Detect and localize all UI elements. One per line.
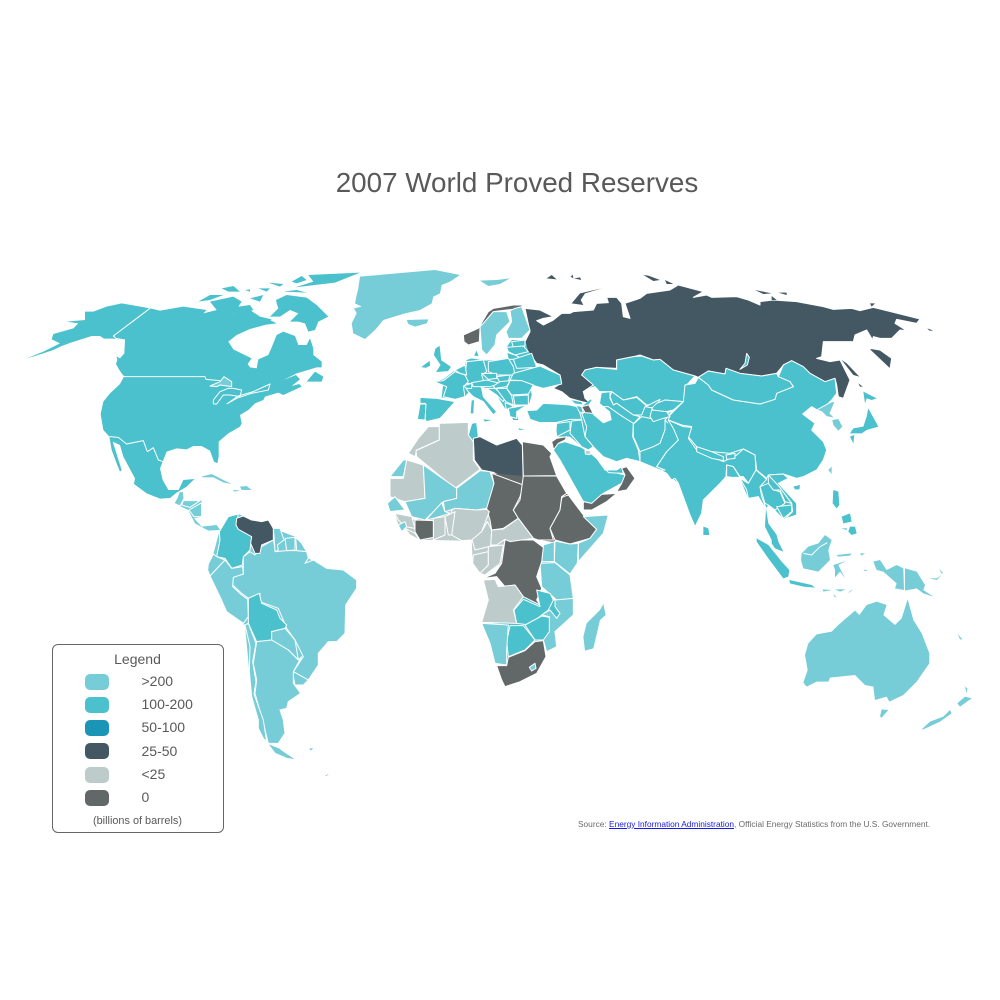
Somalia [578,515,608,562]
base land: southwest and central Asia [557,392,687,470]
Brazil [233,540,357,680]
Czech Republic [482,373,497,379]
Sumatra [757,538,789,578]
Sri Lanka [703,527,709,535]
Syria [556,422,570,437]
Suriname [285,537,295,551]
Guinea [395,513,415,528]
border: Canada and United States [119,373,220,381]
border: Alaska and Canada [113,308,150,340]
Crete [518,428,525,430]
Liberia [405,528,419,540]
Indonesian and Pacific islands [823,553,962,639]
Venezuela [236,516,273,553]
region: Europe [417,305,562,430]
base land: Southern Africa [482,597,573,665]
Western New Guinea [873,560,904,590]
Gabon [473,552,488,573]
Mozambique [542,598,573,652]
Kenya [554,541,578,574]
region: Greenland and North Atlantic [352,270,510,339]
Turkmenistan [597,392,640,424]
swatch: 0 [85,790,109,806]
Romania [507,381,533,395]
Namibia [482,623,508,665]
Madagascar [583,604,606,651]
Zimbabwe [525,616,549,640]
Thailand [760,483,785,510]
Democratic Republic of the Congo [483,540,543,605]
Jordan and Israel [552,437,567,450]
label: 25-50: 25-50 [142,742,177,758]
Mongolia [698,368,793,404]
Guatemala [174,492,184,506]
swatch: 100-200 [85,696,109,712]
Australia [803,599,929,702]
Iraq [570,420,593,450]
Jamaica [233,490,241,492]
base land: Indochina [740,470,797,518]
Central African Republic [491,518,533,545]
label: 50-100: 50-100 [142,718,185,734]
Afghanistan [633,410,673,452]
legend unit note: (billions of barrels) [93,814,182,826]
base land: Sahel and Horn [487,473,597,544]
United Arab Emirates [607,467,623,473]
Sarawak border [803,543,827,555]
base land: South America [208,514,357,743]
base land: South Asia and Himalaya [657,420,756,483]
Cote d'Ivoire [415,520,433,540]
Kyrgyzstan [652,400,683,412]
Serbia [496,388,513,405]
Canada, United States and Mexico [27,303,322,499]
Egypt [522,442,557,476]
Greenland [352,270,460,339]
Uzbekistan [610,392,660,415]
French Guiana [296,537,307,552]
Mauritania [390,460,425,502]
Arctic archipelago [198,273,360,332]
Tajikistan [650,410,670,422]
Philippines [833,490,857,535]
Italy [465,385,497,415]
Borneo [801,535,832,572]
Switzerland [463,383,472,388]
Togo and Benin [445,512,455,535]
label: 0: 0 [142,788,149,804]
Angola [482,579,523,623]
Lithuania [507,352,522,359]
region: South America [208,514,357,776]
Chad [487,473,523,530]
Vietnam [768,474,797,523]
Ireland [420,360,431,368]
Japan [850,392,878,443]
Spain [420,397,455,422]
Java [789,580,815,588]
region: sub-Saharan Africa [387,460,608,687]
Hispaniola [240,486,252,490]
Greece [508,405,527,418]
Portugal [417,404,426,420]
Slovakia [497,375,510,383]
legend heading: Legend [114,650,161,666]
swatch: >200 [85,674,109,690]
Ghana [433,517,445,540]
Albania and Macedonia [505,403,513,410]
region: North America [27,273,360,531]
Kuwait [585,451,591,455]
Georgia [570,399,583,405]
Great Britain [433,345,452,373]
Colombia [217,514,252,568]
Belarus [513,353,537,368]
Germany [465,360,487,385]
Sulawesi [833,561,846,578]
Caspian Sea [585,386,612,423]
legend panel [52,644,224,832]
Paraguay [272,628,298,660]
Taiwan [828,467,832,474]
North Korea [817,402,835,418]
Bhutan [726,453,735,459]
base land: Central America [174,492,220,531]
Honduras [182,501,200,507]
Falkland Islands [309,748,313,751]
region: Southeast Asia and Oceania [757,490,972,729]
Morocco [408,427,439,457]
Bangladesh [727,465,740,477]
Bulgaria [513,395,528,405]
Oman [617,467,635,492]
Saudi Arabia [553,442,625,503]
label: 100-200: 100-200 [142,696,193,712]
Denmark [473,349,479,357]
Lake Erie and St Lawrence outline [227,384,270,404]
Nepal [697,447,723,461]
Tasmania [880,709,888,718]
Cameroon [472,522,495,550]
Uganda [542,542,554,562]
Azerbaijan [582,405,595,413]
Botswana [507,626,535,657]
Nigeria [452,508,489,541]
Lesotho [529,663,536,671]
Algeria [416,422,480,488]
border: United States and Mexico [109,437,163,462]
Sweden [480,312,510,355]
Svalbard [480,278,510,286]
swatch: 50-100 [85,720,109,736]
Lake Superior [210,377,232,387]
Norway [463,305,523,345]
New Zealand [922,687,972,729]
Ecuador [208,554,225,576]
title: 2007 World Proved Reserves [336,167,698,198]
Laos [768,475,792,503]
Latvia [507,346,528,355]
Sierra Leone [398,522,407,532]
Hainan [793,485,800,489]
Finland [506,307,530,338]
arctic islands of Russia [547,275,933,387]
Tierra del Fuego [267,743,297,760]
South Georgia [325,773,329,776]
Uruguay [293,672,308,685]
region: Russia and northern Eurasia [525,275,933,403]
Sudan [513,476,567,540]
Papua New Guinea [905,568,933,597]
Chile [245,623,273,748]
Ukraine [510,366,562,388]
Republic of the Congo [480,545,503,575]
Sardinia [471,400,474,413]
South Africa [497,641,546,687]
Estonia [512,340,525,347]
Nicaragua [189,503,202,517]
Tunisia [468,422,478,442]
Newfoundland [307,372,323,382]
country: Russia [525,285,920,403]
swatch: <25 [85,766,109,782]
Benelux [455,365,467,375]
label: <25: <25 [142,766,165,782]
Turkey [527,403,582,423]
Bolivia [248,593,287,642]
Western Sahara [390,460,407,477]
Iran [582,407,640,462]
region: East and South Asia [650,361,878,548]
Austria [472,380,500,387]
Mali [405,465,457,520]
Zambia [514,590,553,625]
India [657,420,756,527]
Cuba [202,474,232,484]
Ethiopia [550,495,597,544]
Armenia [575,405,583,413]
South Korea [832,419,842,431]
Croatia and Bosnia [487,388,505,402]
Malay peninsula [765,508,780,548]
Myanmar [740,470,767,508]
Niger [443,471,494,512]
Poland [488,358,515,375]
base land: West and Central Africa [395,509,533,575]
France [434,372,468,399]
Cambodia [777,505,792,518]
Kazakhstan [582,356,695,405]
Guyana [273,528,284,552]
Malaysia peninsula tip [772,535,783,552]
base land: continental Europe [435,340,562,420]
Hungary [493,381,510,388]
label: >200: >200 [142,672,173,688]
region: northern Africa [408,422,557,488]
source note: Source: Energy Information Administration, Official Energy Statistics from the U.S. Government. [578,819,930,829]
Peru [210,560,248,623]
China [668,361,837,478]
Lake Michigan and Huron [213,388,242,404]
Iceland [407,319,428,327]
Burkina Faso [426,503,450,520]
Senegal [387,497,405,512]
swatch: 25-50 [85,742,109,758]
Argentina [253,640,302,743]
Pakistan [640,420,678,470]
Libya [473,437,523,485]
Sicily [483,419,492,422]
Yemen [583,493,617,510]
region: Middle East and Central Asia [527,356,695,510]
Tanzania [540,563,573,600]
Lake Baikal [740,353,749,369]
base land: East Africa [542,542,578,600]
